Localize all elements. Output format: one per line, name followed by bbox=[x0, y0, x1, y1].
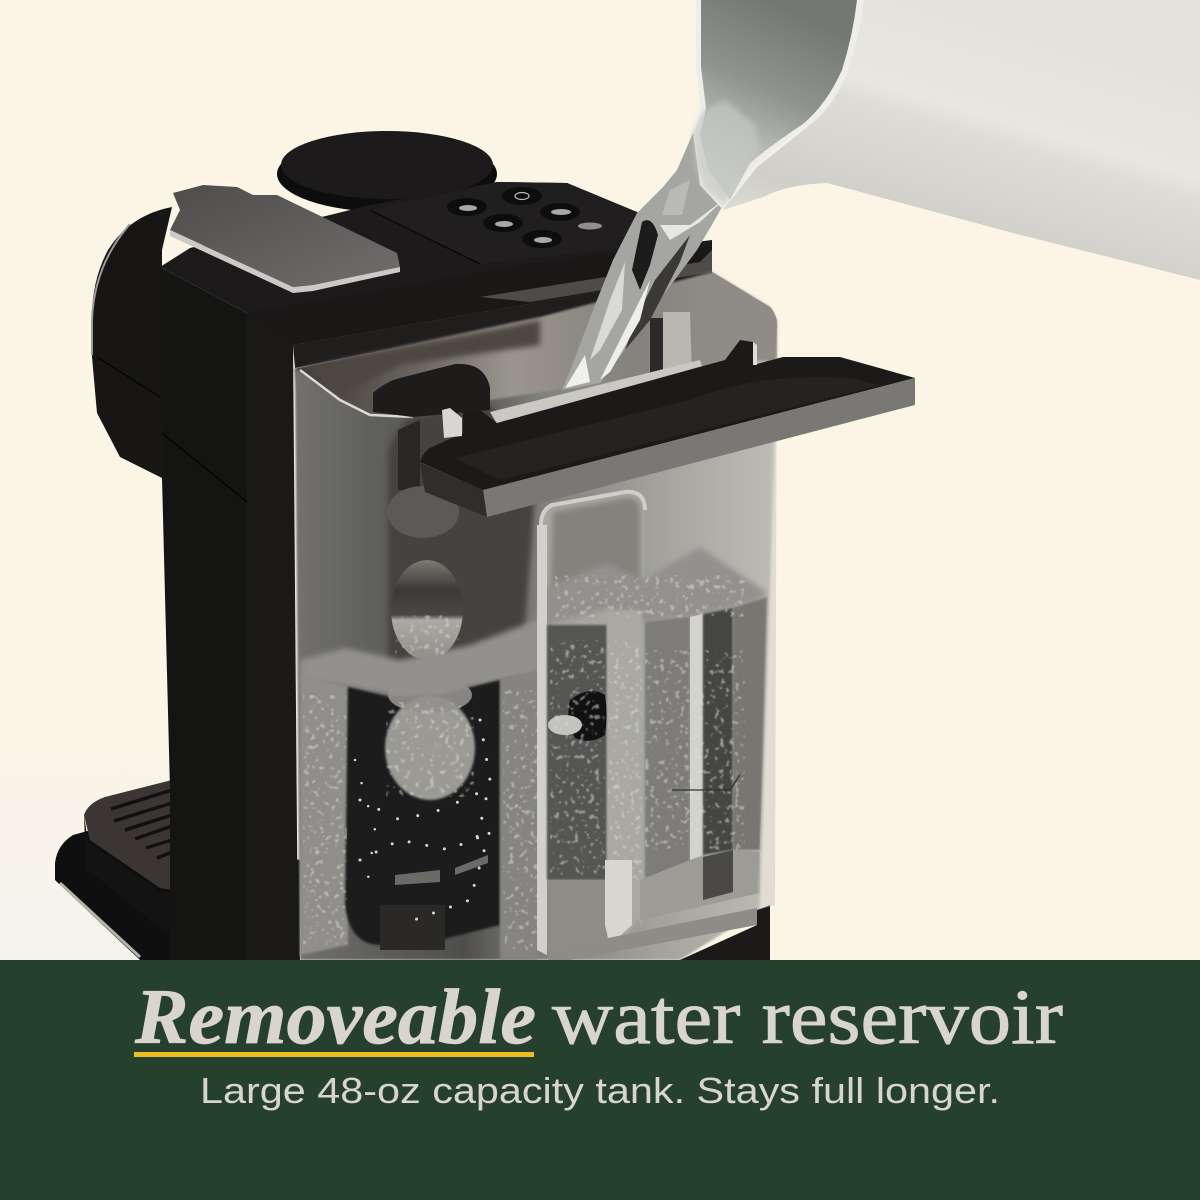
heading underline bbox=[134, 1052, 534, 1057]
drip tray and base bbox=[55, 780, 300, 960]
bottom band bbox=[548, 908, 757, 960]
tank upper body bbox=[295, 360, 777, 960]
water stream bbox=[562, 133, 727, 390]
dark internal panel bbox=[388, 405, 537, 690]
water left strip bbox=[300, 675, 348, 955]
background bbox=[0, 0, 1200, 960]
subheading: Large 48-oz capacity tank. Stays full longer. bbox=[200, 1070, 1000, 1111]
dark blob bbox=[568, 691, 606, 741]
black panel bbox=[345, 680, 500, 945]
MIN FILL mark bbox=[672, 775, 740, 790]
machine dial bbox=[277, 131, 497, 212]
water surface bbox=[300, 547, 767, 695]
white water pitcher bbox=[693, 0, 1200, 280]
tray slots bbox=[111, 790, 172, 858]
tank clear side bbox=[712, 272, 777, 380]
round openings bbox=[387, 486, 459, 538]
heading bbox=[134, 973, 1063, 1060]
rear head of machine bbox=[92, 207, 172, 478]
heading: Removeable bbox=[134, 973, 536, 1060]
inner window bbox=[538, 492, 645, 945]
window interior under water bbox=[547, 625, 607, 880]
tank rear interior bbox=[295, 272, 777, 420]
rounded black tab bbox=[373, 364, 490, 417]
bubbles bbox=[303, 575, 745, 950]
machine body bbox=[97, 182, 712, 960]
water mid strip bbox=[500, 670, 537, 960]
water tank bbox=[295, 272, 777, 960]
open tank lid bbox=[420, 340, 915, 517]
control buttons bbox=[447, 187, 602, 248]
right chamber bbox=[645, 617, 690, 880]
caption band bbox=[0, 960, 1200, 1200]
metal lid plate bbox=[170, 185, 400, 293]
heading: water reservoir bbox=[552, 973, 1063, 1060]
